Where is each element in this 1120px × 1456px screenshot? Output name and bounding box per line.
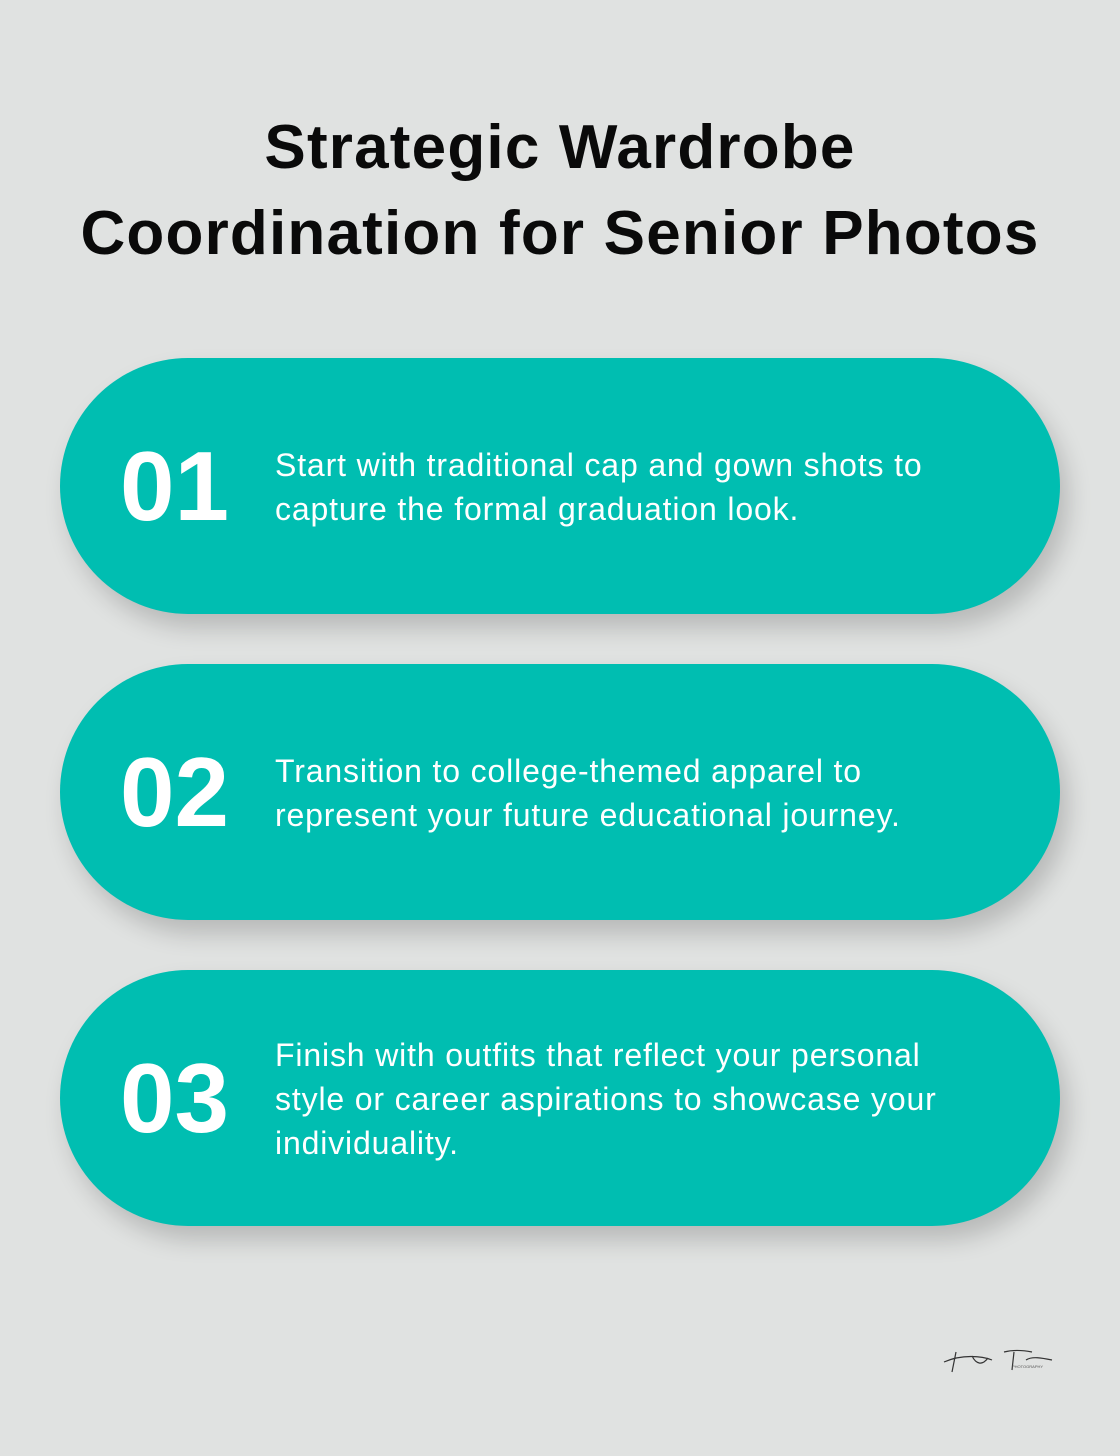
card 2 bbox=[60, 664, 1060, 920]
title: Strategic Wardrobe bbox=[264, 113, 856, 182]
number 01: 01 bbox=[120, 431, 229, 541]
text 1: Start with traditional cap and gown shots to bbox=[275, 447, 923, 483]
number 02: 02 bbox=[120, 737, 229, 847]
signature logo: PHOTOGRAPHY bbox=[1012, 1364, 1043, 1369]
text 3: style or career aspirations to showcase your bbox=[275, 1081, 937, 1117]
card 3 bbox=[60, 970, 1060, 1226]
text 2 bbox=[275, 753, 901, 833]
text 3 bbox=[275, 1037, 937, 1161]
text 1 bbox=[275, 447, 923, 527]
text 3: Finish with outfits that reflect your personal bbox=[275, 1037, 921, 1073]
text 3: individuality. bbox=[275, 1125, 459, 1161]
title bbox=[80, 113, 1040, 268]
text 1: capture the formal graduation look. bbox=[275, 491, 799, 527]
number 03: 03 bbox=[120, 1043, 229, 1153]
title: Coordination for Senior Photos bbox=[80, 199, 1040, 268]
signature logo bbox=[944, 1350, 1052, 1372]
text 2: represent your future educational journey. bbox=[275, 797, 901, 833]
text 2: Transition to college-themed apparel to bbox=[275, 753, 862, 789]
card 1 bbox=[60, 358, 1060, 614]
